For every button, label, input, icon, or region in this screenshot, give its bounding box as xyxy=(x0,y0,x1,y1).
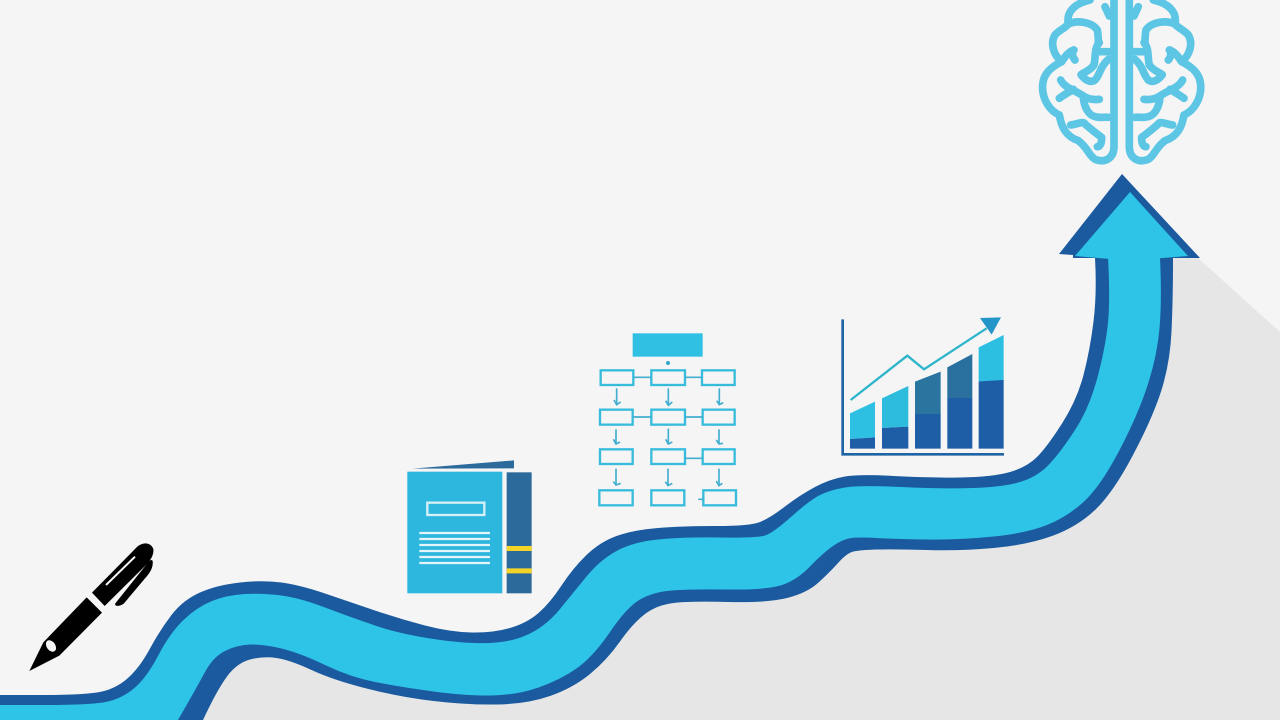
book text lines xyxy=(419,533,490,563)
pen clip xyxy=(115,560,153,606)
pen cap xyxy=(92,543,153,606)
book top page xyxy=(413,460,514,469)
flowchart connectors xyxy=(613,377,723,499)
growth arrow xyxy=(0,174,1200,720)
icon: pen xyxy=(29,543,153,671)
pen highlight xyxy=(106,557,135,585)
flowchart header xyxy=(633,333,703,357)
pen nib hole xyxy=(44,638,58,654)
chart trend arrowhead xyxy=(980,317,1001,335)
chart axes xyxy=(843,319,1004,454)
arrowhead inner xyxy=(1075,192,1188,259)
icon: book xyxy=(407,460,532,593)
flowchart boxes xyxy=(599,370,736,505)
arrow inner ribbon xyxy=(0,258,1161,720)
brain right hemisphere xyxy=(1129,0,1201,161)
arrowhead outer xyxy=(1059,174,1200,258)
ground shadow xyxy=(190,258,1280,720)
chart trend line xyxy=(851,328,987,400)
icon: brain xyxy=(1043,0,1201,161)
chart bars xyxy=(850,335,1004,449)
book cover xyxy=(407,472,502,593)
pen body xyxy=(29,597,102,671)
icon: bar chart xyxy=(843,317,1004,454)
book label xyxy=(427,503,484,515)
book bands xyxy=(507,546,532,573)
brain left hemisphere xyxy=(1043,0,1114,161)
arrow outer ribbon xyxy=(0,258,1173,720)
icon: flowchart xyxy=(599,333,736,505)
book spine xyxy=(507,472,532,593)
